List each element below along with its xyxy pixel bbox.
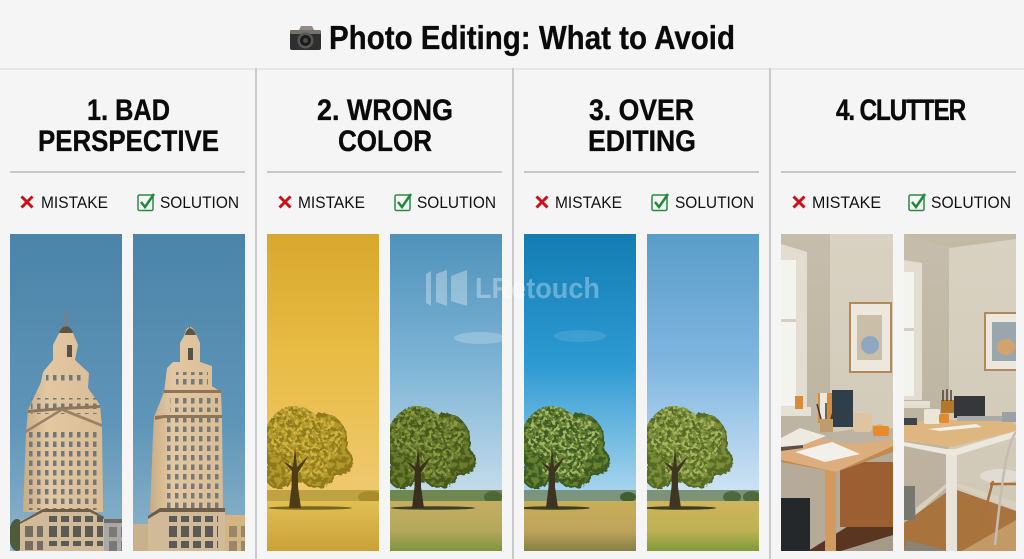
photo: tilted building xyxy=(9,234,122,551)
panel: over editing xyxy=(520,94,761,551)
watermark: LRetouch: LRetouch xyxy=(475,273,600,305)
label: mistake: MISTAKE xyxy=(812,193,881,212)
heading: 2. WRONG COLOR: 2. WRONG xyxy=(317,94,453,127)
header rule xyxy=(0,68,1024,70)
photo: corrected color tree xyxy=(386,234,506,551)
heading: 3. OVER EDITING: EDITING xyxy=(588,125,696,158)
watermark: LRetouch xyxy=(426,270,600,306)
heading: 3. OVER EDITING xyxy=(588,94,696,158)
photo: yellow cast tree xyxy=(263,234,382,551)
heading: 1. BAD PERSPECTIVE xyxy=(38,94,219,158)
label: mistake: MISTAKE xyxy=(555,193,622,212)
heading: 4. CLUTTER: 4. CLUTTER xyxy=(836,94,966,127)
label: solution: SOLUTION xyxy=(931,193,1011,212)
heading: 2. WRONG COLOR: COLOR xyxy=(338,125,432,158)
heading: 3. OVER EDITING: 3. OVER xyxy=(589,94,694,127)
heading: 1. BAD PERSPECTIVE: 1. BAD xyxy=(87,94,170,127)
label: solution: SOLUTION xyxy=(417,193,496,212)
heading: 1. BAD PERSPECTIVE: PERSPECTIVE xyxy=(38,125,219,158)
photo: oversaturated tree xyxy=(520,234,636,551)
photo: natural edit tree xyxy=(643,234,761,551)
label: solution: SOLUTION xyxy=(675,193,754,212)
title xyxy=(290,19,735,56)
icon: camera xyxy=(290,26,321,50)
photo: cluttered desk xyxy=(781,234,893,552)
label: solution: SOLUTION xyxy=(160,193,239,212)
title text: Photo Editing: What to Avoid xyxy=(329,19,735,56)
heading: 2. WRONG COLOR xyxy=(317,94,453,158)
panel: clutter xyxy=(781,94,1020,552)
photo: straight building xyxy=(133,234,245,551)
panel: bad perspective xyxy=(9,94,245,551)
label: mistake: MISTAKE xyxy=(298,193,365,212)
photo: tidy desk xyxy=(904,234,1020,551)
panel: wrong color xyxy=(263,94,506,551)
label: mistake: MISTAKE xyxy=(41,193,108,212)
icon: watermark logo xyxy=(426,270,467,306)
